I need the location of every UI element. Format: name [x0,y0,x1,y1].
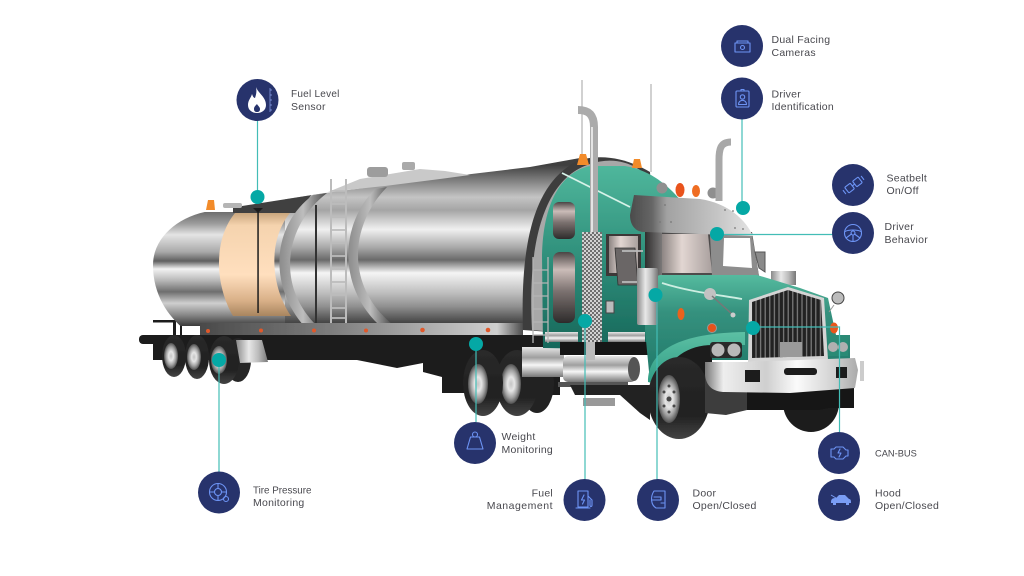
door window with mirror [606,234,643,285]
icon: car with open hood [831,495,851,505]
side passenger window [723,238,752,268]
icon: ID badge [736,90,749,107]
rear bumper [139,320,182,344]
trailer rail with marker lights [200,323,523,335]
label: Driver [884,221,914,233]
front fender [648,332,745,385]
fuel tank and chrome cylinders [522,347,650,420]
label: Open/Closed [692,500,757,512]
green sleeper cab [542,166,690,350]
air cleaner cap [771,271,796,285]
label: Identification [772,101,834,113]
rear mud flap [236,340,268,363]
right front wheel [783,374,839,432]
label: Fuel [532,488,553,500]
small side ladder [533,257,548,343]
label: Weight [502,431,536,443]
callout: hood open/closed [818,479,939,521]
label: Dual Facing [772,34,830,46]
fuel level sensor rod [253,208,263,313]
icon: engine [831,447,848,459]
trailer chassis [153,335,560,395]
label: Open/Closed [875,500,939,512]
label: Sensor [291,101,326,113]
icon: steering wheel [844,224,862,242]
right mirror [829,292,844,312]
sun visor [630,195,753,236]
label: CAN-BUS [875,448,917,458]
icon: camera [735,41,750,52]
teal anchor dots [212,190,760,367]
callout: seatbelt on/off [832,164,927,206]
callout: driver behavior [832,212,928,254]
label: Hood [875,488,901,500]
callout: fuel management [487,479,606,521]
antennas [582,80,651,172]
windshield pillar [645,232,662,276]
sleeper outer rim [523,157,660,340]
grille [748,287,828,362]
icon: weight [467,432,483,449]
sleeper windows [553,202,575,323]
under bumper [747,385,854,410]
front wheel arch shadow [654,345,712,400]
passenger window surround [710,235,759,276]
callout: driver identification [721,78,834,120]
icon: tire gauge [210,484,228,502]
callout connector lines [219,119,840,480]
tank body [150,150,585,326]
label: Behavior [884,234,928,246]
front mud flap [705,373,747,415]
label: Management [487,500,553,512]
right marker light [830,322,838,334]
headlights [710,335,848,358]
icon: door [652,491,665,508]
sleeper steps [545,332,645,342]
left exhaust stack [578,110,602,360]
front wheel [648,357,710,439]
tanker truck illustration [139,80,864,439]
windshield side mirror [755,252,765,272]
tanker truck infographic [139,25,938,521]
tank top plate and hatches [223,162,470,208]
side marker lights [678,308,716,332]
tail beacon [206,200,215,210]
icon: fuel pump [576,491,592,508]
air cleaner cylinder [637,268,658,325]
horn and hood ornament [704,288,736,318]
windshield frame [645,232,759,276]
chassis under steps [560,342,660,355]
right exhaust stack [719,142,731,201]
front bumper [705,358,864,393]
small vent [606,301,614,313]
hood [645,275,850,382]
callout: CAN-BUS [818,432,917,474]
fuel cut-away window [219,213,291,316]
label: Fuel Level [291,89,340,100]
callout: tire pressure monitoring [198,472,312,514]
tank ladder [331,179,346,325]
callout: weight monitoring [454,422,553,464]
label: Driver [772,88,801,100]
hood shine [662,283,742,299]
icon: flame with gauge [248,87,272,113]
label: Door [692,488,716,500]
label: On/Off [886,185,919,197]
trailer wheels [162,335,251,384]
windshield [662,234,712,273]
roof beacons and clearance lights [577,154,718,198]
cab shine stroke [562,173,630,207]
tank bands [279,187,392,326]
callout: dual facing cameras [721,25,830,67]
callout: door open/closed [637,479,757,521]
label: Monitoring [253,497,305,509]
label: Seatbelt [886,172,927,184]
label: Tire Pressure [253,486,312,496]
label: Monitoring [502,444,553,456]
label: Cameras [772,47,816,59]
callout: fuel level sensor [236,79,340,121]
drive wheels [463,350,554,416]
icon: seatbelt buckle [842,175,865,195]
